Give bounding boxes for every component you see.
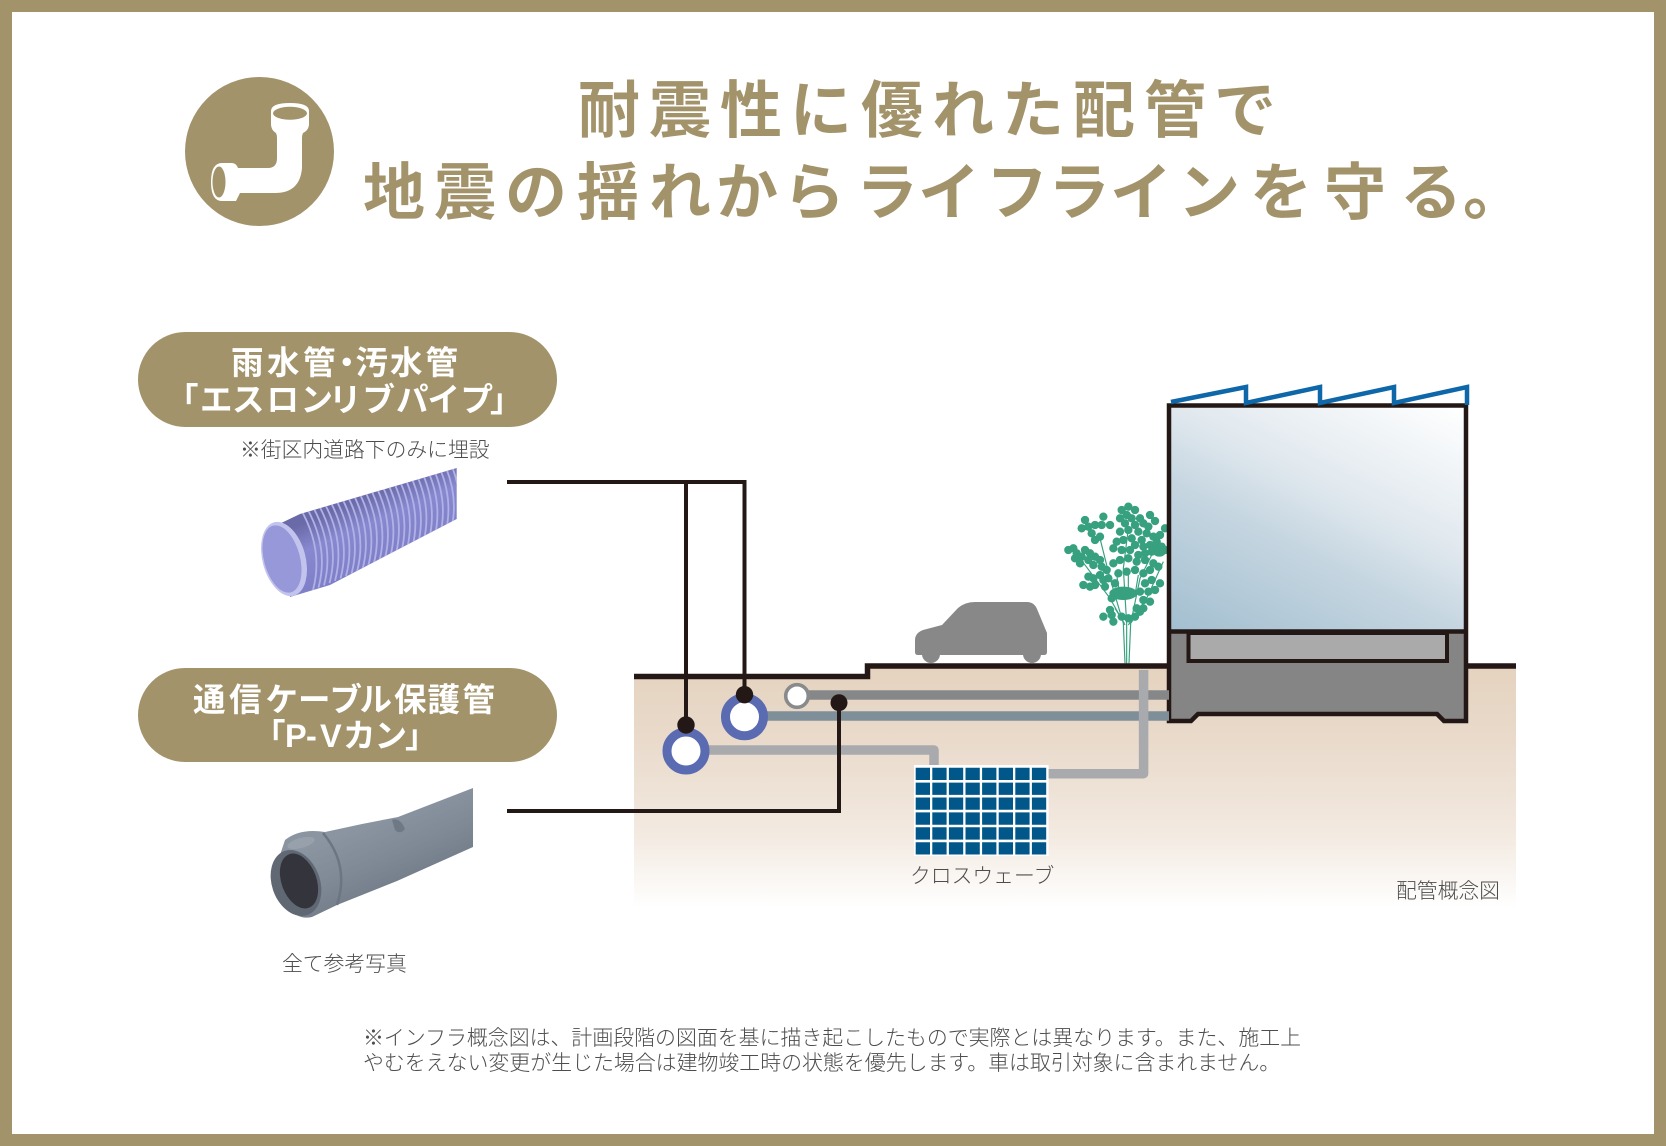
cross wave grid xyxy=(914,765,1049,856)
panel: communication cable protection pipe label: 「P-Vカン」 xyxy=(253,718,438,754)
ground line xyxy=(634,666,1516,676)
note: buried only under roads: ※街区内道路下のみに埋設 xyxy=(240,439,490,462)
label: piping concept diagram: 配管概念図 xyxy=(1396,880,1500,903)
tree xyxy=(1068,507,1167,663)
title: 耐震性に優れた配管で xyxy=(578,77,1276,146)
label: cross wave: クロスウェーブ xyxy=(910,865,1054,888)
title: 地震の揺れからライフラインを守る。 xyxy=(363,159,1525,228)
pipe rings xyxy=(667,685,808,770)
solar panels on roof xyxy=(1171,387,1467,405)
note: all reference photos: 全て参考写真 xyxy=(282,953,407,976)
footnote: やむをえない変更が生じた場合は建物竣工時の状態を優先します。車は取引対象に含まれません。 xyxy=(363,1052,1280,1075)
panel: communication cable protection pipe label: 通信ケーブル保護管 xyxy=(193,681,495,718)
leader lines and dots xyxy=(507,482,848,811)
icon: pipe elbow badge xyxy=(185,77,334,226)
panel: rainwater and sewage pipe label: 「エスロンリブパイプ」 xyxy=(166,381,523,418)
panel: communication cable protection pipe label xyxy=(138,668,557,762)
building xyxy=(1169,406,1466,721)
title xyxy=(363,77,1525,228)
car xyxy=(915,602,1047,663)
footnote xyxy=(363,1027,1301,1075)
footnote: ※インフラ概念図は、計画段階の図面を基に描き起こしたもので実際とは異なります。また、施工上 xyxy=(363,1027,1301,1050)
photo: grey P-V pipe xyxy=(262,788,473,923)
underground pipes xyxy=(686,670,1169,774)
panel: rainwater and sewage pipe label: 雨水管・汚水管 xyxy=(231,345,458,381)
panel: piping concept diagram xyxy=(507,387,1516,916)
panel: rainwater and sewage pipe label xyxy=(138,332,557,427)
photo: ribbed purple pipe xyxy=(261,468,457,597)
soil xyxy=(634,668,1516,916)
